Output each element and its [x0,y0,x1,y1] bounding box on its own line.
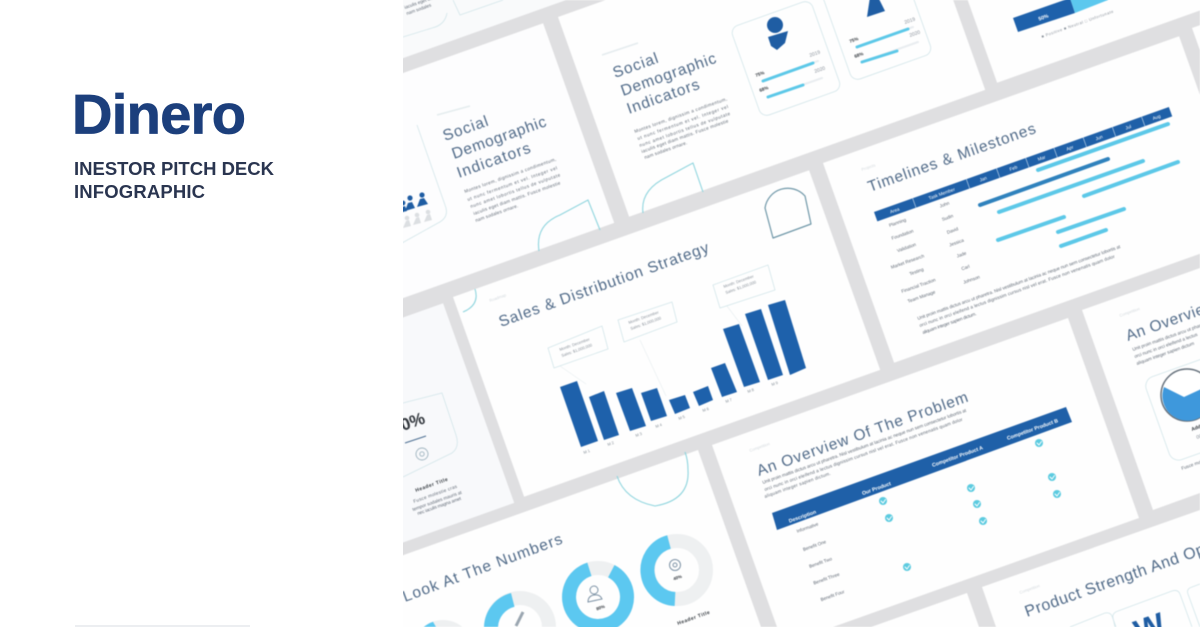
body text: ut nunc fermentum et vel. Integer vel [637,104,729,141]
heading: Social [611,50,661,82]
legend: ■ Positive ■ Neutral □ Unfortunate [1041,8,1115,39]
decorative arc [643,163,703,213]
stacked bar [1013,0,1108,32]
body text: iaculis eget diam mattis. Fusce molestie [473,180,561,216]
left brand panel [0,0,403,627]
row labels: David [946,226,959,235]
body text: Unit proin mattis dictus arcu ut pharetra. Nisl vestibulum at lacinia ac neque nun sem consectetur lobortis at [762,408,967,485]
slide: timelines and milestones [823,36,1200,363]
card: female indicators: 2020 [909,29,921,39]
heading: Timelines & Milestones [866,120,1038,196]
subtitle: INFOGRAPHIC [74,181,205,202]
slide: market share bar [926,0,1200,83]
body text: Unit proin mattis dictus arcu ut pharetra. Nisl vestibulum at lacinia ac neque nun sem consectetur lobortis at [917,244,1122,321]
bar chart: M 8 [747,387,755,394]
check icons [879,439,1061,571]
callouts: Sales: $1,000,000 [561,342,593,358]
body text [634,96,731,160]
row labels: Planning [888,217,907,228]
body text [1132,320,1200,366]
donut chart 1 [424,620,462,627]
table header: Jul [1125,124,1132,131]
donut chart 4: 40% [673,574,683,581]
stat number: 0% [398,409,427,435]
card with pie [1143,340,1200,463]
body text: aliquam integer sapien dictum [1136,341,1195,366]
table header: Area [889,206,901,214]
card: female indicators: 75% [849,36,859,44]
subtitle [74,158,275,202]
row labels: Jessica [948,238,965,248]
row labels [796,521,846,602]
row labels: Foundation [891,228,915,241]
icon: cloud circle [416,448,428,460]
slide: sales and distribution strategy: Roadmap [489,292,507,303]
callouts: Month: December [559,336,591,352]
body text: Montes lorem, dignissim a condimentum, [464,157,557,194]
card: male indicators: 75% [755,70,765,78]
slide: an overview of the problem: Competition [749,441,770,453]
row labels: Jade [956,250,967,259]
decorative arc [617,452,688,506]
heading [611,50,719,118]
table header: Task Member [928,187,956,201]
decorative arc [538,200,600,251]
heading: Indicators [625,76,702,118]
row labels: Benefit Four [820,589,846,602]
decorative shapes [765,188,811,238]
body text: iaculis eget diam mattis. Fusce molestie [641,118,729,154]
row labels: Benefit One [802,539,827,552]
callouts: Sales: $1,000,000 [725,279,757,295]
callouts: Month: December [723,273,755,289]
bar chart: M 1 [583,448,591,455]
table header: Competitor Product A [931,445,984,469]
heading: Social [441,113,491,145]
bar chart: M 5 [678,414,686,421]
card: female indicators: 2019 [904,16,916,26]
header title: Header Title [415,477,449,494]
row labels: Informative [796,521,819,534]
body text: aliquam integer sapien dictum. [922,311,977,335]
subtitle: INESTOR PITCH DECK [74,158,275,179]
card: male indicators: 68% [759,85,769,93]
row labels: Carl [961,264,970,271]
donut chart 2 [484,591,556,627]
table header [772,407,1072,530]
icon: faded people row [403,210,432,228]
heading: Demographic [450,113,549,163]
cards [1070,584,1200,627]
bar chart: M 6 [702,406,710,413]
bar chart: M 9 [771,380,779,387]
slide: social demographic indicators, left [187,23,614,350]
slide: an overview, right: Competition [1119,306,1140,318]
body text: nec iaculis magna amet [417,496,462,516]
table header: Our Product [861,481,892,497]
table header: Jun [1095,134,1104,141]
body text: orci nunc in orci eleifend a lectus dignissim cursus nisl vel erat. Fusce non venenatis quam dolor [919,254,1116,328]
body text: nunc amet lobortis tellus de vulputate [639,111,731,148]
slide: product strength [982,510,1200,627]
slide: bottom blank [871,593,979,627]
body text: Fusce molestie cras [413,484,458,504]
table header: Feb [1009,164,1018,172]
body text: nunc amet lobortis tellus de vulputate [470,172,561,209]
bar chart [560,300,806,455]
heading: An Overview Of The Problem [755,389,970,480]
table header: Mar [1037,154,1047,162]
body text: nam sodales ornare. [644,140,688,160]
table header: Competitor Product B [1006,418,1059,442]
bar chart: M 2 [607,440,615,447]
heading: Demographic [619,50,719,100]
body text: nam sodales ornare. [475,203,519,223]
body text [464,157,561,223]
row labels: John [939,200,950,209]
row labels: Team Manage [907,289,936,304]
slide: top left fragment: nam sodales [406,2,433,16]
stacked bar: 50% [1038,13,1050,23]
row labels: Testing [909,267,925,276]
slide: timelines and milestones: Projects [861,162,876,172]
table header: Description [788,509,817,525]
body text: tempor sodales mauris at [412,490,463,512]
card: male indicators: 2019 [809,49,821,59]
card: male indicators: 2020 [814,65,826,75]
slide: top left fragment [173,0,600,115]
row labels: Market Research [890,253,925,270]
slide: left stat card [87,303,514,627]
callouts: Month: December [628,309,660,325]
gantt bars [980,124,1178,246]
body text: aliquam integer sapien dictum. [764,471,831,499]
donut chart 3 [569,568,627,626]
row labels: Benefit Two [808,556,833,569]
bar chart: M 3 [635,431,643,438]
body text: orci nunc in orci eleifend a lectus dignissim cursus nisl vel erat. Fusce non venenatis quam dolor [764,417,964,492]
row labels: Johnson [962,274,981,285]
body text: orci nunc in orci eleifend a lectus [1134,332,1199,359]
card: female indicators: 68% [854,51,864,59]
bar chart: M 7 [725,397,733,404]
slide: an overview of the problem [712,318,1139,627]
slide: right edge sliver [1192,0,1200,228]
row labels: Validation [896,242,917,253]
heading: Look At The Numbers [400,531,565,606]
callouts: Sales: $1,000,000 [630,315,662,331]
body text: Montes lorem, dignissim a condimentum, [634,96,728,134]
callouts [548,265,775,396]
table header: Aug [1152,113,1162,121]
slide: a look at the numbers [342,450,761,627]
slide: social demographic indicators, right [558,0,985,217]
donut chart 3: 80% [596,604,606,611]
table header: Jan [979,175,988,183]
bar chart: M 4 [655,422,663,429]
footer mark [75,625,250,627]
row labels [888,200,981,304]
slide: sales and distribution strategy [453,170,880,497]
table header [874,107,1172,221]
heading: Sales & Distribution Strategy [497,239,711,331]
row labels: Benefit Three [813,571,841,586]
card: female indicators [821,0,933,81]
title: Dinero [72,82,246,146]
card: male indicators [730,0,842,117]
slide: an overview, right [1082,268,1200,510]
icon: people row [399,192,428,213]
body text: ut nunc fermentum et vel. Integer vel [467,165,558,202]
heading [441,113,549,182]
slide: product strength: Competition [1019,583,1040,595]
row labels: Sudin [941,213,954,222]
header title: Header Title [677,610,711,627]
body text [412,484,463,516]
table header: Apr [1066,144,1075,152]
heading: Indicators [455,140,533,182]
donut chart 4 [647,541,706,599]
row labels: Financial Traction [901,277,937,294]
